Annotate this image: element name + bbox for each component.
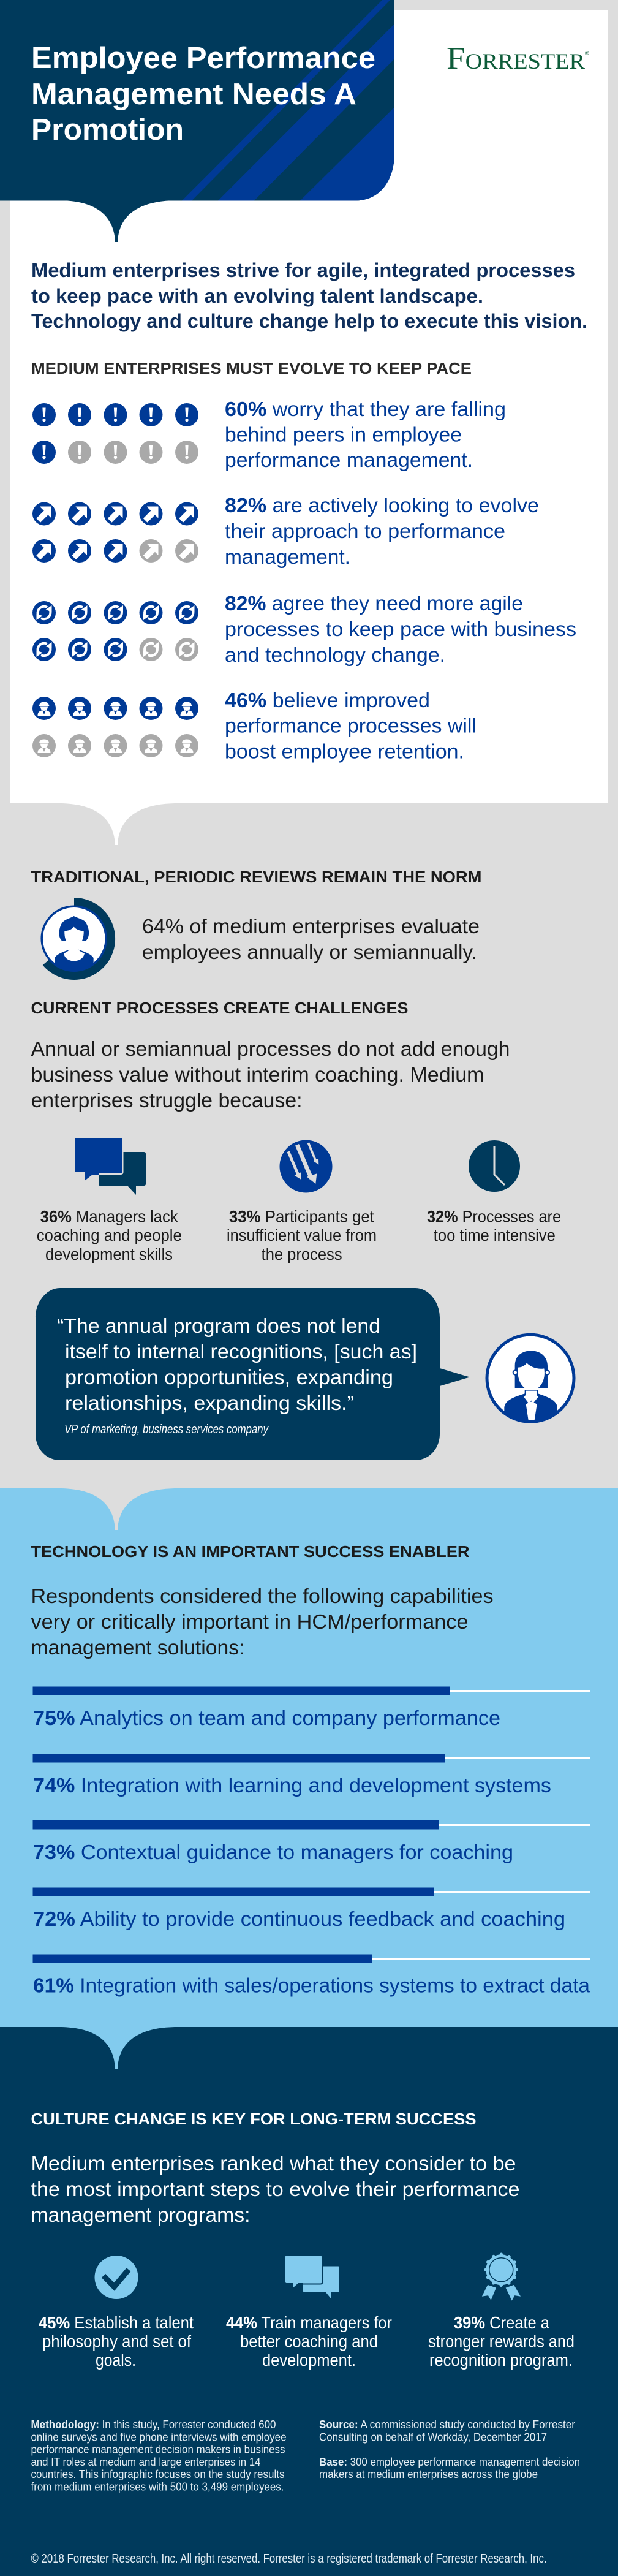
- text: ranked steps: the most important steps to evolve their performance: [31, 2178, 519, 2200]
- text: methodology: performance management decision makers in business: [31, 2444, 285, 2456]
- banner tail: [59, 200, 178, 242]
- text: 64%: employees annually or semiannually.: [142, 941, 477, 963]
- icon: woman avatar: [487, 1335, 574, 1425]
- text: 60%: behind peers in employee: [225, 423, 462, 446]
- title: Management Needs A: [31, 78, 356, 111]
- bar: 74%: [33, 1754, 590, 1797]
- caption: 39%: 39% Create a: [454, 2313, 550, 2332]
- text: ranked steps: Medium enterprises ranked what they consider to be: [31, 2152, 516, 2175]
- caption: 44%: 44% Train managers for: [226, 2313, 392, 2332]
- caption: 39%: [428, 2313, 575, 2370]
- text: respondents: Respondents considered the following capabilities: [31, 1585, 494, 1607]
- caption: 44%: development.: [262, 2351, 356, 2370]
- title: Promotion: [31, 113, 184, 146]
- text: 82% evolve: their approach to performance: [225, 520, 505, 542]
- bar: 72%: [33, 1887, 590, 1930]
- text: 82% agile: processes to keep pace with business: [225, 618, 576, 640]
- icons: arrow 82%: [32, 502, 198, 563]
- text: respondents: management solutions:: [31, 1636, 245, 1659]
- gray tail: [59, 1488, 178, 1530]
- caption: 39%: stronger rewards and: [428, 2332, 575, 2351]
- bar: 75%: 75% Analytics on team and company performance: [33, 1707, 500, 1729]
- icons: person 46%: [32, 697, 198, 757]
- caption: 32%: 32% Processes are: [427, 1207, 561, 1225]
- stat row: 60%: [32, 398, 506, 471]
- quote text: promotion opportunities, expanding: [65, 1366, 393, 1388]
- icon: 64% donut with person: [42, 898, 115, 980]
- intro text: Technology and culture change help to execute this vision.: [31, 310, 587, 332]
- quote text: [57, 1314, 417, 1414]
- text: ranked steps: [31, 2152, 519, 2226]
- text: 60%: [225, 398, 506, 471]
- caption: 36%: [37, 1207, 182, 1263]
- title: [31, 42, 375, 146]
- text: 82% agile: 82% agree they need more agile: [225, 592, 523, 615]
- heading: traditional reviews: TRADITIONAL, PERIODIC REVIEWS REMAIN THE NORM: [31, 869, 481, 886]
- intro text: Medium enterprises strive for agile, integrated processes: [31, 259, 575, 281]
- text: annual processes: Annual or semiannual processes do not add enough: [31, 1037, 510, 1060]
- caption: 33%: insufficient value from: [227, 1226, 377, 1244]
- header banner: [0, 0, 394, 242]
- text: source: Source: A commissioned study conducted by Forrester: [319, 2419, 575, 2431]
- title: Employee Performance: [31, 42, 375, 75]
- text: 46%: performance processes will: [225, 714, 477, 737]
- text: respondents: very or critically important in HCM/performance: [31, 1610, 468, 1633]
- text: 64%: 64% of medium enterprises evaluate: [142, 915, 480, 938]
- panel: intro and evolve section: [0, 0, 608, 845]
- caption: 33%: the process: [262, 1245, 342, 1263]
- stat row: 82% agile: [32, 592, 576, 666]
- caption: 32%: [427, 1207, 561, 1244]
- bar: 73%: 73% Contextual guidance to managers for coaching: [33, 1841, 513, 1863]
- icon: check circle: [94, 2256, 138, 2299]
- heading: current processes: CURRENT PROCESSES CREATE CHALLENGES: [31, 1000, 408, 1017]
- icon: speech bubbles: [75, 1138, 146, 1195]
- text: source: [319, 2419, 575, 2444]
- panel: current challenges: [31, 1000, 561, 1263]
- text: 64%: [142, 915, 480, 963]
- text: annual processes: enterprises struggle because:: [31, 1089, 303, 1112]
- text: methodology: from medium enterprises with 500 to 3,499 employees.: [31, 2480, 284, 2493]
- caption: 36%: development skills: [45, 1245, 173, 1263]
- caption: 39%: recognition program.: [429, 2351, 573, 2370]
- text: base: makers at medium enterprises across the globe: [319, 2468, 538, 2480]
- caption: 45%: philosophy and set of: [42, 2332, 191, 2351]
- tail of white panel: [59, 803, 178, 845]
- text: methodology: and IT roles at medium and large enterprises in 14: [31, 2456, 261, 2468]
- text: source: Consulting on behalf of Workday, December 2017: [319, 2431, 547, 2444]
- quote attribution: VP of marketing, business services company: [64, 1423, 269, 1436]
- heading: must evolve: MEDIUM ENTERPRISES MUST EVOLVE TO KEEP PACE: [31, 360, 472, 377]
- text: 82% agile: and technology change.: [225, 643, 445, 666]
- text: annual processes: business value without interim coaching. Medium: [31, 1063, 484, 1086]
- heading: culture: CULTURE CHANGE IS KEY FOR LONG-TERM SUCCESS: [31, 2111, 477, 2128]
- logo: Forrester: FORRESTER: [447, 41, 585, 76]
- text: 60%: 60% worry that they are falling: [225, 398, 506, 420]
- caption: 44%: [226, 2313, 392, 2370]
- text: 46%: 46% believe improved: [225, 689, 430, 711]
- caption: 45%: goals.: [96, 2351, 136, 2370]
- text: 46%: [225, 689, 477, 762]
- text: 46%: boost employee retention.: [225, 740, 464, 762]
- text: 82% evolve: management.: [225, 545, 350, 568]
- text: methodology: online surveys and five phone interviews with employee: [31, 2431, 287, 2444]
- bar: 74%: 74% Integration with learning and development systems: [33, 1774, 551, 1797]
- quote text: itself to internal recognitions, [such as]: [65, 1340, 417, 1363]
- intro text: to keep pace with an evolving talent landscape.: [31, 285, 483, 307]
- text: 82% agile: [225, 592, 576, 666]
- text: methodology: countries. This infographic focuses on the study results: [31, 2468, 284, 2480]
- caption: 36%: coaching and people: [37, 1226, 182, 1244]
- text: methodology: Methodology: In this study, Forrester conducted 600: [31, 2419, 276, 2431]
- text: 82% evolve: [225, 494, 539, 568]
- text: 82% evolve: 82% are actively looking to evolve: [225, 494, 539, 517]
- text: ranked steps: management programs:: [31, 2203, 250, 2226]
- icon: clock: [469, 1140, 520, 1192]
- caption: 44%: better coaching and: [240, 2332, 378, 2351]
- caption: 45%: 45% Establish a talent: [39, 2313, 194, 2332]
- text: methodology: [31, 2419, 287, 2493]
- panel: traditional reviews: [31, 869, 481, 980]
- callout: quote bubble: [36, 1288, 470, 1460]
- banner diagonal stripes: [182, 0, 394, 201]
- bar: 61%: 61% Integration with sales/operations systems to extract data: [33, 1974, 590, 1996]
- text: 60%: performance management.: [225, 449, 473, 471]
- heading: technology: TECHNOLOGY IS AN IMPORTANT SUCCESS ENABLER: [31, 1544, 469, 1561]
- bar: 75%: [33, 1686, 590, 1729]
- caption: 33%: 33% Participants get: [229, 1207, 374, 1225]
- panel: technology section: [0, 1488, 618, 2027]
- text: respondents: [31, 1585, 494, 1659]
- bar: 73%: [33, 1820, 590, 1863]
- caption: 36%: 36% Managers lack: [40, 1207, 178, 1225]
- stat row: 46%: [32, 689, 477, 762]
- icon: rosette: [481, 2254, 521, 2301]
- logo: Forrester: ®: [585, 50, 589, 56]
- icons: refresh 82%: [32, 601, 198, 661]
- icon: light speech bubbles: [285, 2256, 339, 2299]
- bar chart: capabilities: [33, 1686, 590, 1996]
- caption: 33%: [227, 1207, 377, 1263]
- text: base: Base: 300 employee performance management decision: [319, 2456, 580, 2468]
- icon: falling arrows: [279, 1140, 332, 1192]
- intro text: [31, 259, 587, 332]
- quote text: “The annual program does not lend: [57, 1314, 380, 1337]
- quote text: relationships, expanding skills.”: [65, 1392, 354, 1414]
- caption: 32%: too time intensive: [434, 1226, 556, 1244]
- text: base: [319, 2456, 580, 2480]
- caption: 45%: [39, 2313, 194, 2370]
- text: annual processes: [31, 1037, 510, 1112]
- stat row: 82% evolve: [32, 494, 539, 568]
- light blue tail: [59, 2027, 178, 2069]
- panel: culture section: [0, 2027, 618, 2576]
- icons: exclamation 60%: [32, 403, 198, 464]
- bar: 72%: 72% Ability to provide continuous feedback and coaching: [33, 1907, 565, 1930]
- bar: 61%: [33, 1955, 590, 1996]
